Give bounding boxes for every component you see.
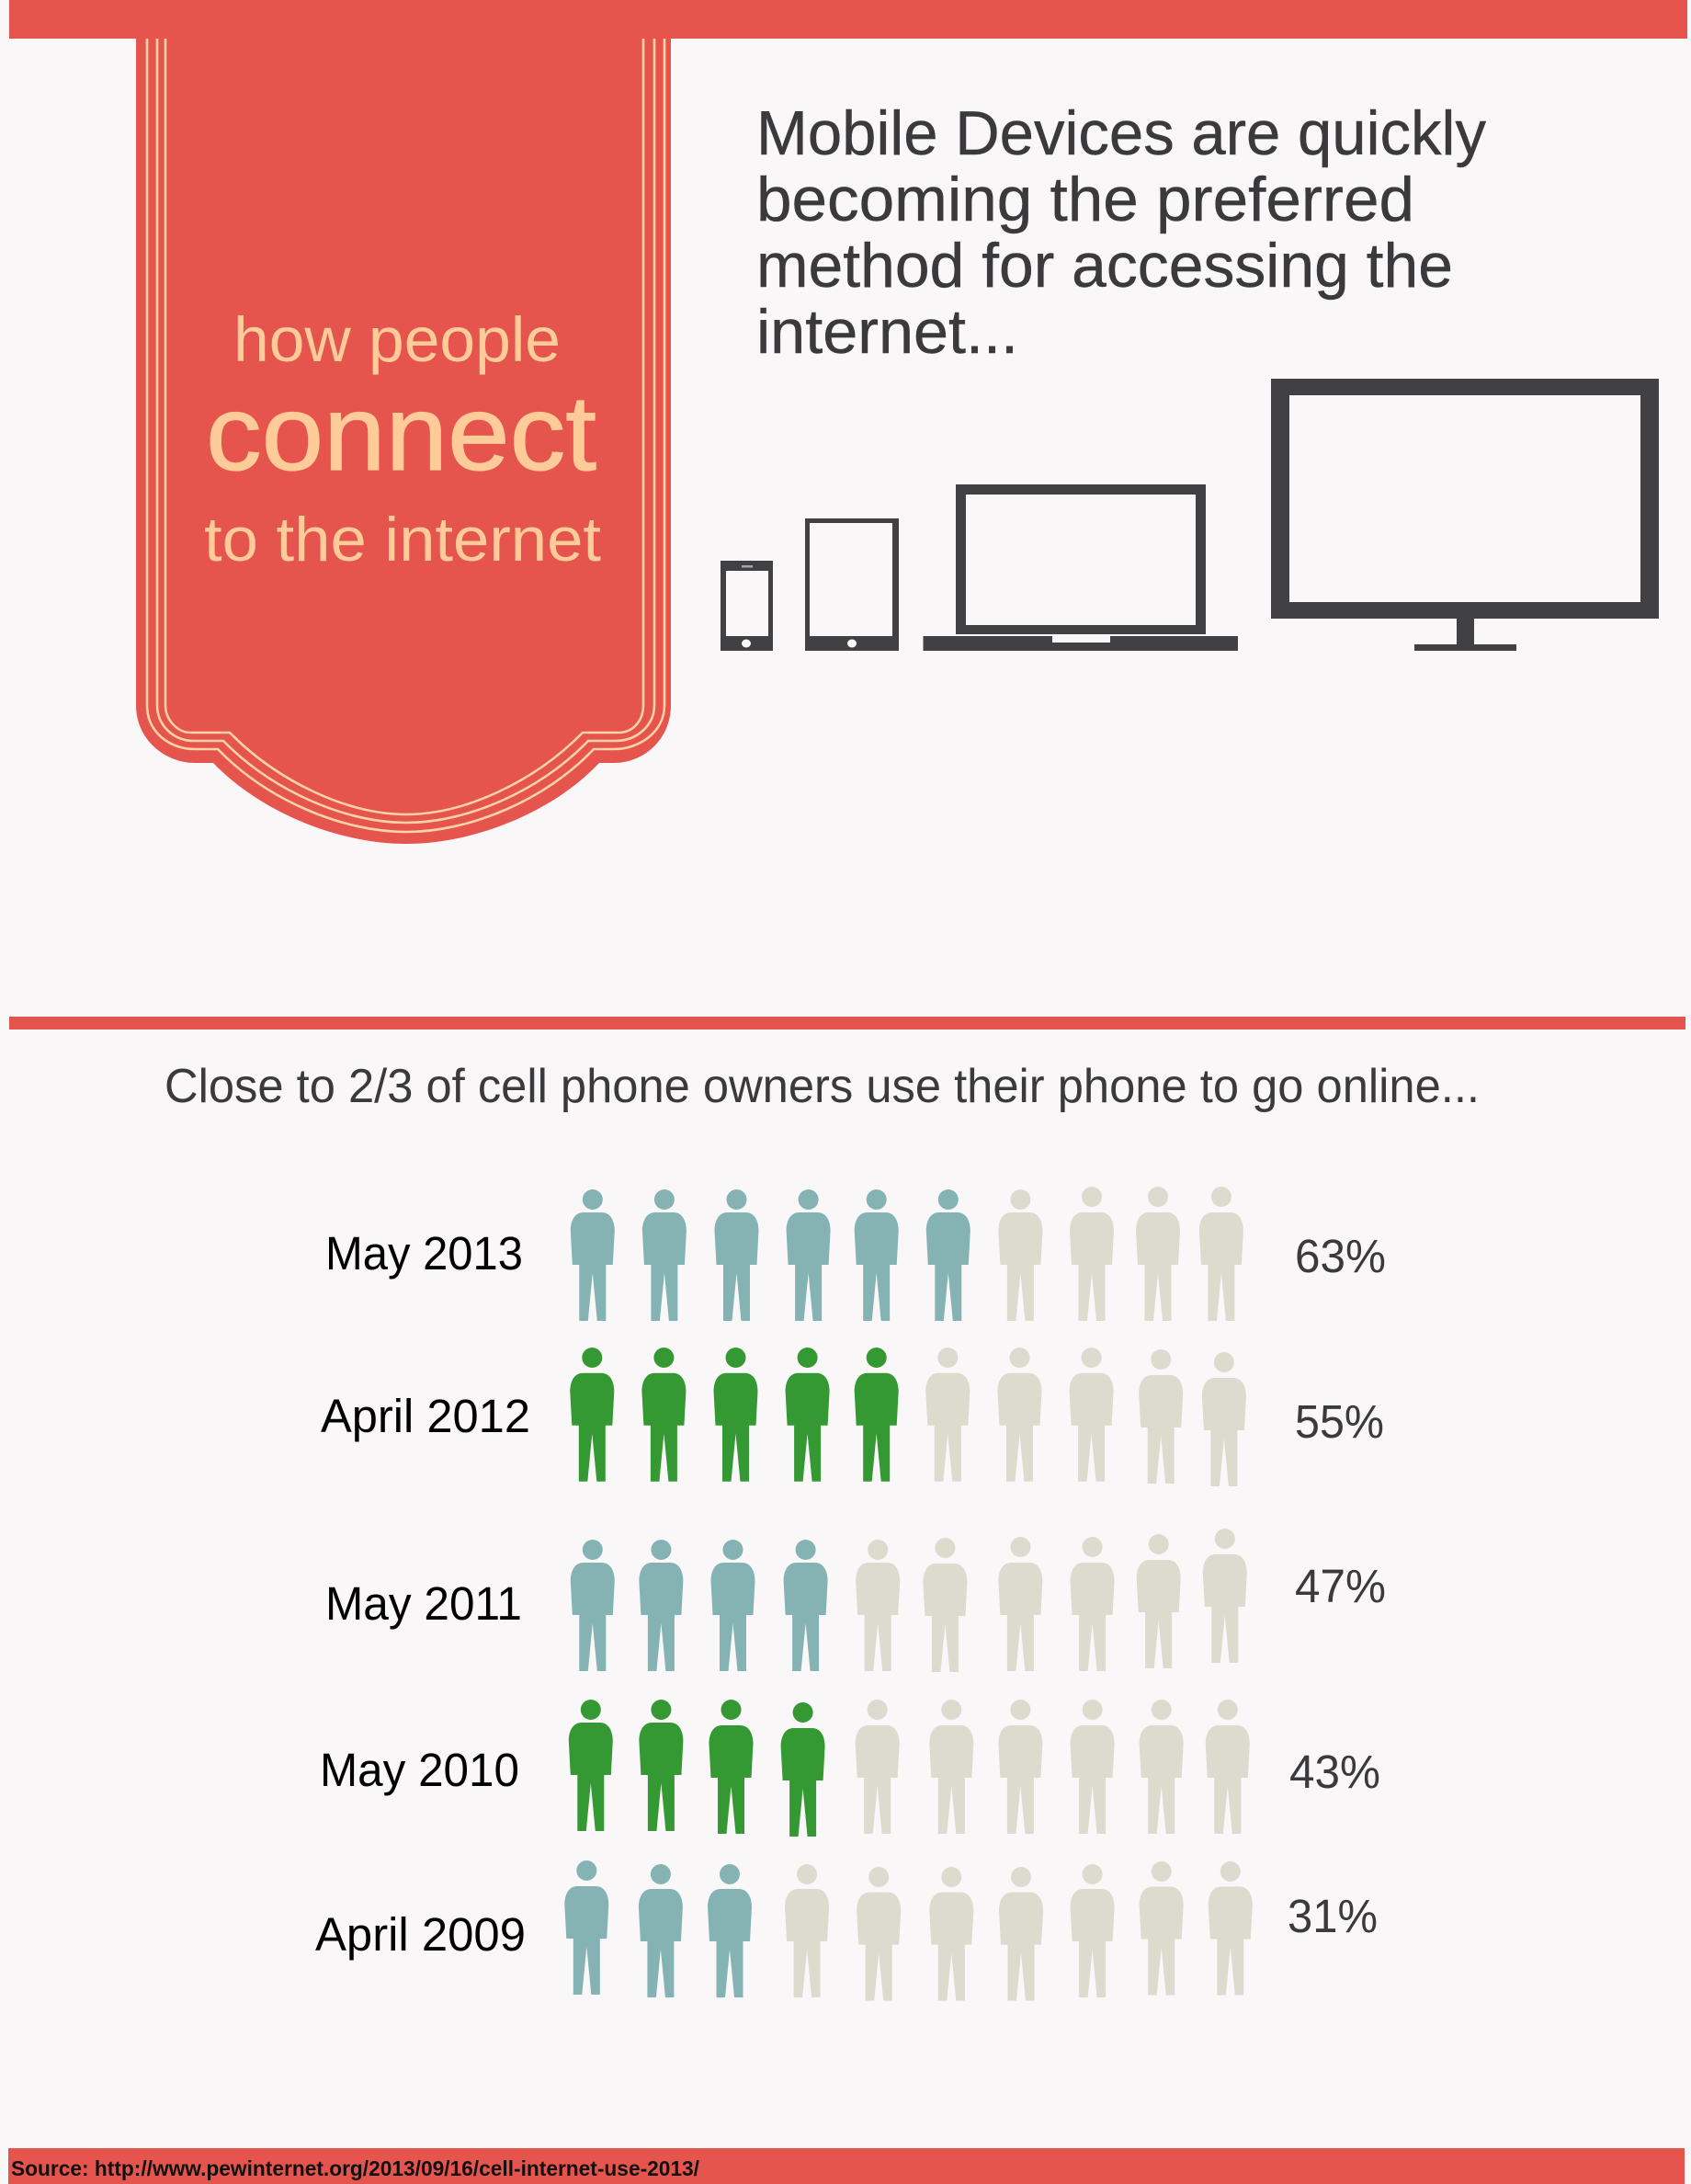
title line: to the internet: to the internet [204,505,601,574]
year label: April 2012 [321,1390,530,1442]
title line: how people: how people [233,304,561,375]
remaining figures: 6 beige [856,1529,1247,1672]
percentage: 63% [1295,1230,1386,1282]
row: May 2013 [325,1187,1386,1321]
icon: desktop monitor [1271,379,1659,651]
icon: tablet [805,518,899,651]
remaining figures: 5 beige [925,1348,1246,1486]
devices illustration [721,379,1659,651]
section heading: Close to 2/3 of cell phone owners use their phone to go online... [165,1060,1480,1113]
percentage: 31% [1288,1890,1378,1942]
filled figures: 4 teal [571,1540,828,1671]
row: May 2010 [320,1700,1380,1837]
intro text block [756,98,1486,367]
remaining figures: 4 beige [998,1187,1243,1321]
year label: May 2010 [320,1744,519,1796]
intro text block: Mobile Devices are quickly [756,98,1486,168]
filled figures: 3 teal [564,1860,752,1997]
filled figures: 5 green [570,1348,899,1482]
row: April 2012 [321,1348,1384,1486]
footer bar [8,2148,1685,2184]
intro text block: method for accessing the [756,231,1453,301]
row: May 2011 [325,1529,1386,1672]
panel: title banner [136,37,671,844]
title line: connect: connect [206,373,596,493]
icon: smartphone [721,561,773,651]
filled figures: 6 teal [571,1189,970,1321]
percentage: 55% [1295,1395,1384,1448]
intro text block: becoming the preferred [756,165,1414,234]
percentage: 47% [1295,1560,1386,1612]
year label: April 2009 [315,1908,526,1961]
remaining figures: 6 beige [856,1700,1250,1834]
filled figures: 4 green [569,1700,825,1837]
icon: laptop [923,484,1238,651]
year label: May 2011 [325,1577,522,1630]
top red bar [9,0,1687,39]
intro text block: internet... [756,297,1018,367]
year label: May 2013 [325,1227,523,1280]
source citation: Source: http://www.pewinternet.org/2013/09/16/cell-internet-use-2013/ [11,2156,700,2180]
row: April 2009 [315,1860,1378,2001]
percentage: 43% [1289,1746,1380,1798]
remaining figures: 7 beige [785,1861,1253,2001]
section divider bar [9,1017,1685,1029]
